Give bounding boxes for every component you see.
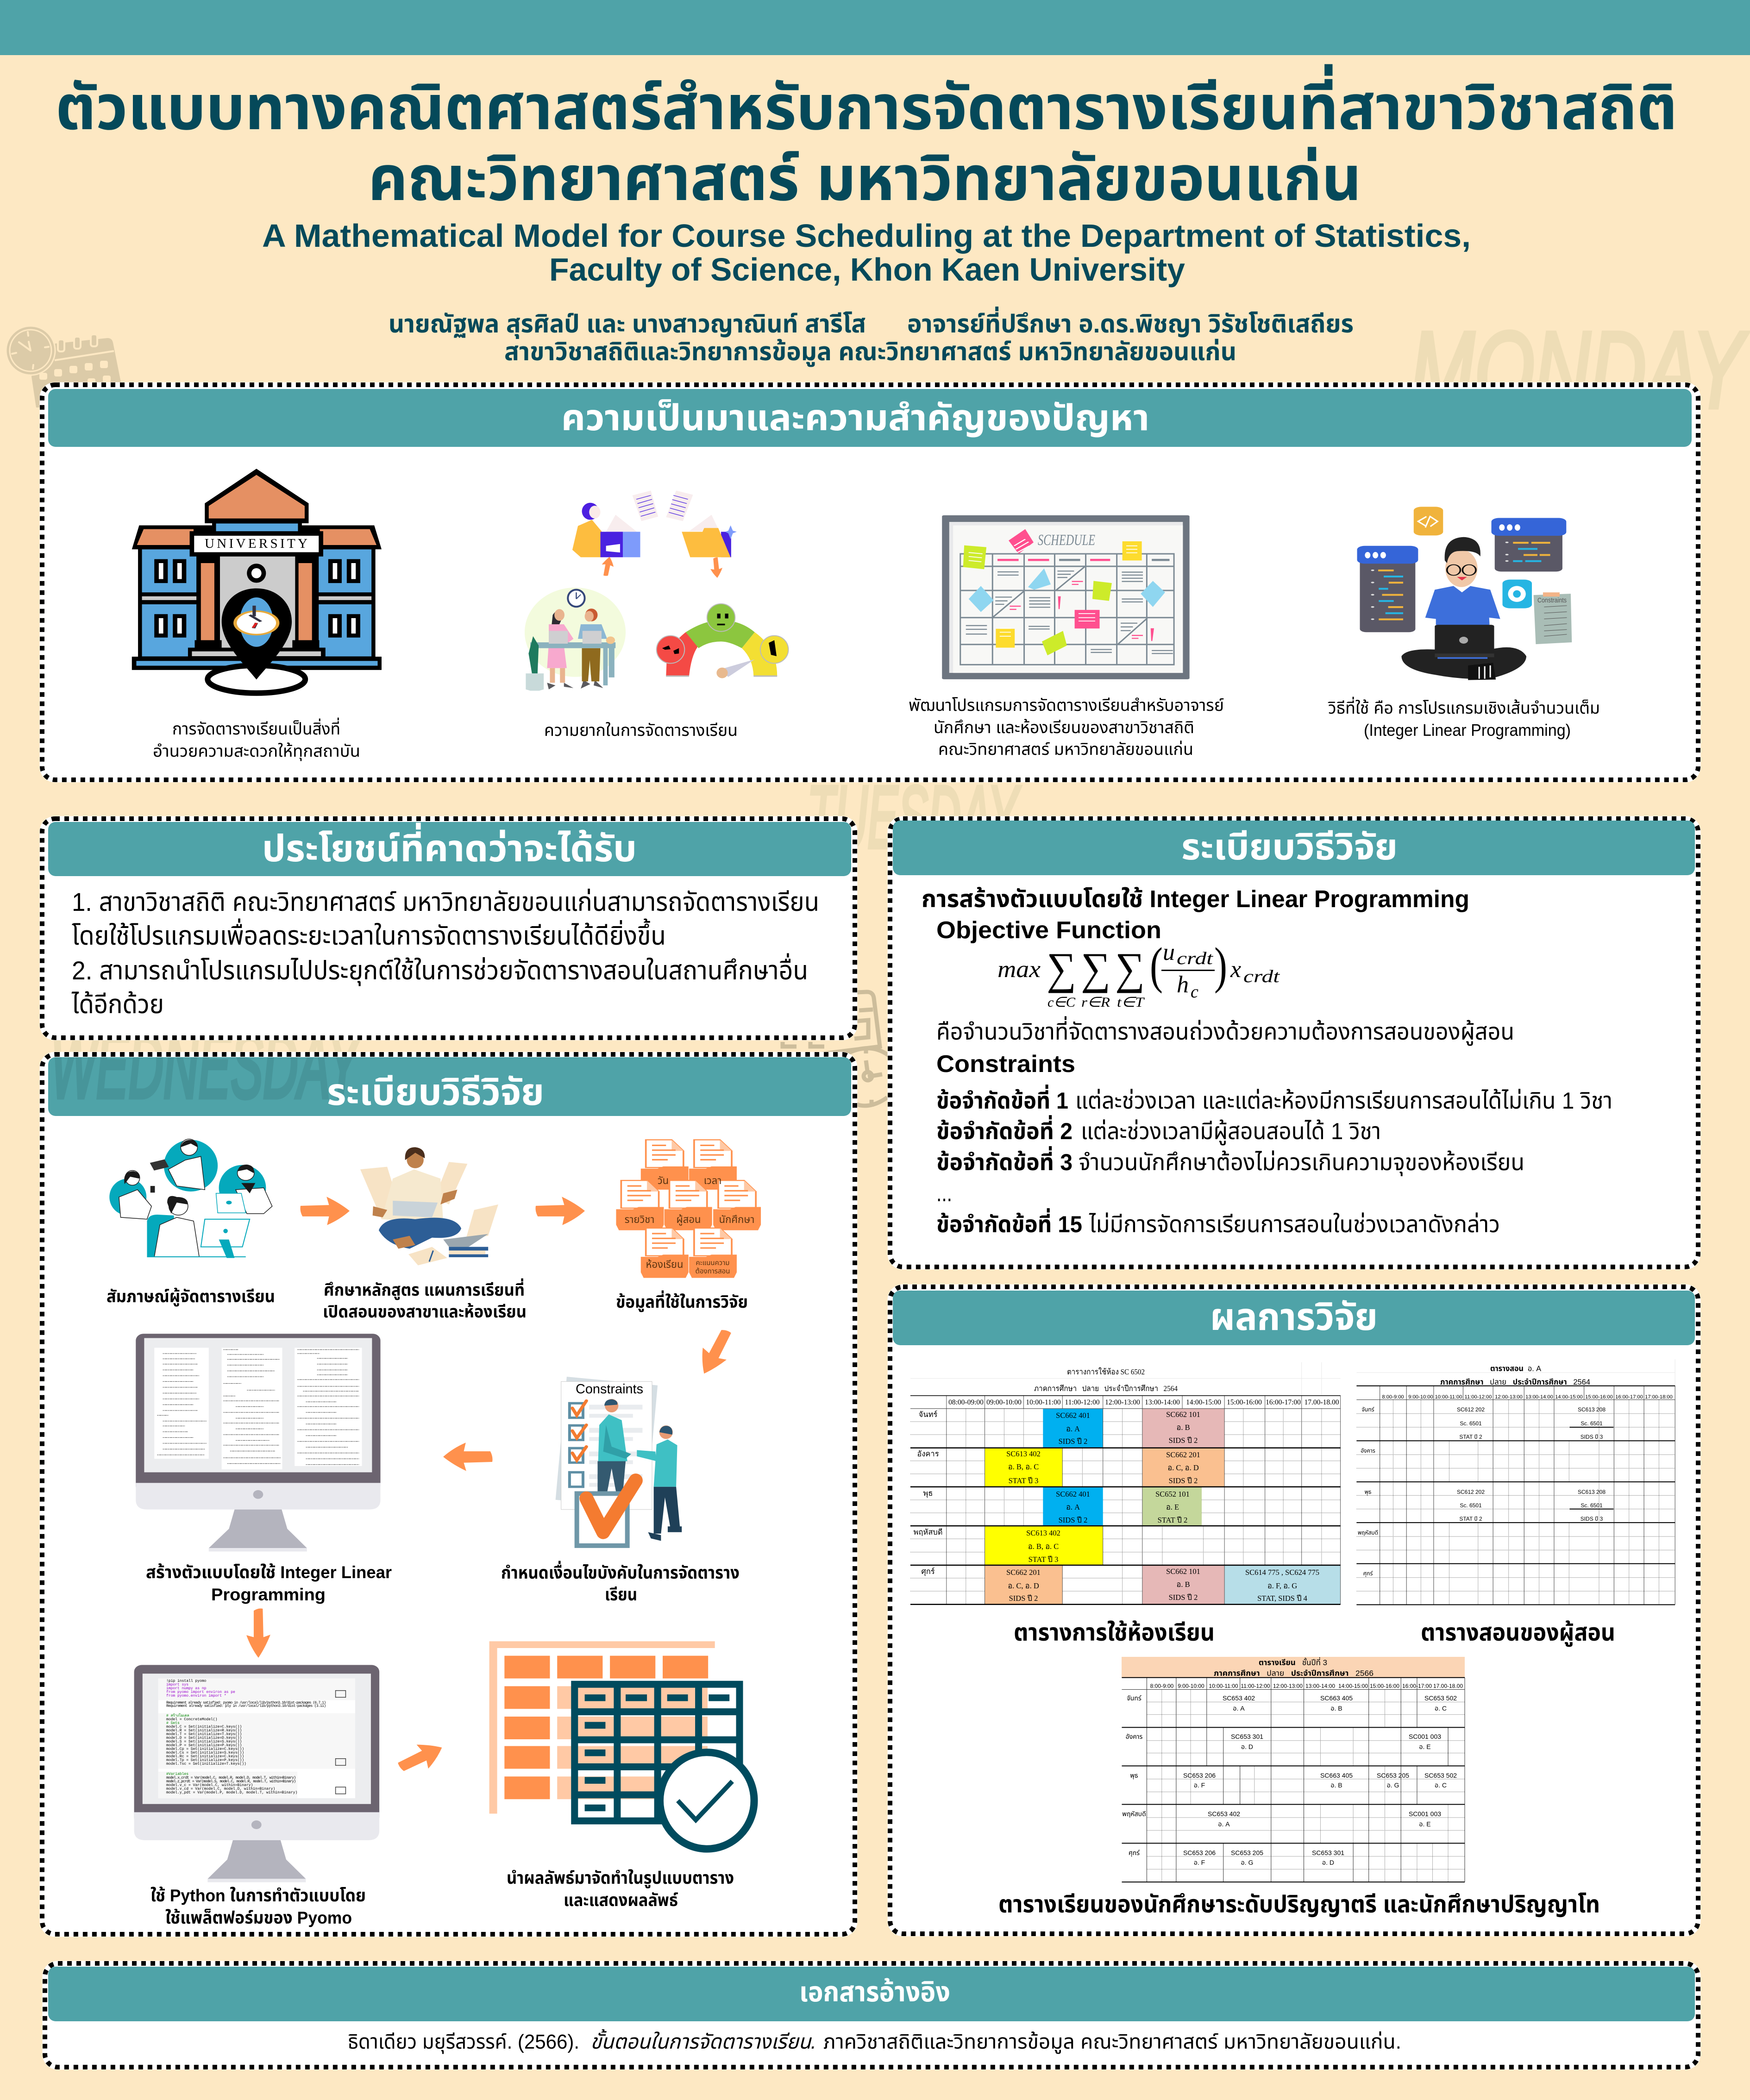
- icon: monitor with python code: model.Tp = Set(initialize=P.keys()): [166, 1758, 244, 1762]
- icon: monitor with python code: model.D = Set(initialize=D.keys()): [166, 1736, 242, 1740]
- caption: room table: ตารางการใช้ห้องเรียน: [1014, 1619, 1215, 1646]
- caption: study curriculum: เปิดสอนของสาขาและห้องเรียน: [323, 1302, 527, 1321]
- panel: research method flow: [42, 1014, 855, 1934]
- table: student timetable: อังคาร: [1126, 1733, 1142, 1740]
- table: room usage: 16:00-17:00: [1266, 1398, 1301, 1406]
- icon: university with location pin: UNIVERSITY: [205, 536, 307, 551]
- authors: [389, 307, 1354, 367]
- title block: [56, 64, 1677, 367]
- table: room usage: SIDS ปี 2: [1059, 1437, 1087, 1446]
- constraint list: แต่ละช่วงเวลามีผู้สอนสอนได้ 1 วิชา: [1081, 1118, 1381, 1145]
- table: lecturer timetable: 8:00-9:00: [1382, 1394, 1404, 1400]
- icon: data folders: ห้องเรียน: [646, 1259, 683, 1270]
- caption: constraints: [501, 1561, 740, 1604]
- table: lecturer timetable: Sc. 6501: [1581, 1420, 1603, 1427]
- icon: data folders: รายวิชา: [625, 1214, 654, 1225]
- arrow diagonal up: [394, 1736, 447, 1779]
- table: room usage: SC662 401: [1056, 1411, 1090, 1420]
- icon: monitor with python code: model.z_pcrdt = Var(model.S, model.C, model.R, model.T, within=Binary): [166, 1780, 296, 1784]
- table: student timetable: SC653 402: [1223, 1694, 1255, 1702]
- table: room usage: 09:00-10:00: [986, 1398, 1022, 1406]
- table: lecturer timetable: Sc. 6501: [1460, 1502, 1482, 1509]
- caption 1: การจัดตารางเรียนเป็นสิ่งที่: [172, 717, 340, 738]
- caption 1: อำนวยความสะดวกให้ทุกสถาบัน: [153, 741, 360, 761]
- table: student timetable: SC653 206: [1183, 1772, 1216, 1779]
- icon: data folders: ต้องการสอน: [695, 1267, 730, 1275]
- icon: data folders: ผู้สอน: [677, 1214, 701, 1226]
- table: lecturer timetable: SIDS ปี 3: [1581, 1434, 1603, 1440]
- caption: study curriculum: [323, 1278, 527, 1321]
- authors: อาจารย์ที่ปรึกษา อ.ดร.พิชญา วิรัชโชติเสถียร: [907, 307, 1354, 338]
- table: room usage: พุธ: [923, 1489, 933, 1498]
- table: room usage: STAT ปี 2: [1158, 1516, 1187, 1524]
- table: lecturer timetable: SC612 202: [1457, 1489, 1485, 1495]
- table: lecturer timetable: ภาคการศึกษา ปลาย ประจำปีการศึกษา 2564: [1440, 1378, 1590, 1386]
- header bar: [48, 822, 851, 876]
- table: student timetable: อ. A: [1233, 1705, 1245, 1712]
- panel: references: [45, 1963, 1698, 2067]
- icon: schedule board: SCHEDULE: [1038, 532, 1095, 549]
- caption: model: [146, 1563, 392, 1604]
- table: lecturer timetable: Sc. 6501: [1460, 1420, 1482, 1427]
- formula: r∈R: [1081, 995, 1110, 1010]
- caption 2: ความยากในการจัดตารางเรียน: [544, 721, 738, 740]
- constraint list: ข้อจำกัดข้อที่ 15: [936, 1208, 1082, 1237]
- table: student timetable: อ. A: [1218, 1820, 1230, 1828]
- caption: constraints: เรียน: [605, 1585, 637, 1604]
- table: student timetable: อ. G: [1241, 1859, 1253, 1866]
- table: lecturer timetable: จันทร์: [1362, 1406, 1374, 1413]
- table: student timetable: SC653 402: [1208, 1810, 1240, 1818]
- English title: Faculty of Science, Khon Kaen University: [549, 251, 1185, 288]
- English title: A Mathematical Model for Course Scheduling at the Department of Statistics,: [262, 218, 1471, 254]
- table: room usage: 13:00-14:00: [1145, 1398, 1180, 1406]
- header bar: [893, 1291, 1695, 1345]
- arrow right 1: [300, 1197, 350, 1225]
- arrow right 2: [535, 1197, 585, 1225]
- table: room usage: SC662 201: [1006, 1568, 1041, 1577]
- constraint list: ข้อจำกัดข้อที่ 1: [936, 1084, 1068, 1114]
- table: room usage: 17.00-18.00: [1305, 1398, 1339, 1406]
- header bar: เอกสารอ้างอิง: [799, 1976, 950, 2007]
- table: student timetable: SC653 502: [1424, 1694, 1457, 1702]
- table: room usage: พฤหัสบดี: [913, 1528, 943, 1536]
- table: student timetable: 8:00-9:00: [1150, 1683, 1174, 1689]
- formula: (: [1150, 937, 1163, 994]
- table: lecturer timetable: STAT ปี 2: [1459, 1434, 1482, 1440]
- formula: h: [1177, 972, 1189, 998]
- table: student timetable: อ. D: [1322, 1859, 1334, 1866]
- icon: monitor with python code: model.x_crdt = Var(model.C, model.R, model.D, model.T, within=Binary): [166, 1776, 296, 1780]
- table: lecturer timetable: 16:00-17:00: [1615, 1394, 1643, 1400]
- table: student timetable: SC653 206: [1183, 1849, 1216, 1856]
- table: lecturer timetable: 10:00-11:00: [1435, 1394, 1462, 1400]
- caption: results: นำผลลัพธ์มาจัดทำในรูปแบบตาราง: [507, 1868, 734, 1888]
- table: room usage: อ. B, อ. C: [1028, 1542, 1059, 1551]
- icon: monitor with python code: model.v_c = Var(model.C, within=Binary): [166, 1783, 253, 1787]
- icon: monitor with python code: !pip install pyomo: [166, 1679, 207, 1683]
- icon: constraints and handshake: [556, 1377, 682, 1546]
- benefits text: [71, 887, 819, 1019]
- caption: data: ข้อมูลที่ใช้ในการวิจัย: [616, 1290, 748, 1312]
- table: student timetable: SC653 205: [1377, 1772, 1409, 1779]
- icon: monitor with python code: #Variables: [166, 1772, 188, 1776]
- benefits text: ได้อีกด้วย: [71, 990, 164, 1019]
- table: student timetable: 16:00-17:00: [1402, 1683, 1432, 1689]
- formula: t∈T: [1117, 995, 1145, 1010]
- small arrow up: [600, 556, 615, 577]
- icon: data folders: นักศึกษา: [719, 1214, 754, 1225]
- caption 3: คณะวิทยาศาสตร์ มหาวิทยาลัยขอนแก่น: [938, 740, 1193, 759]
- table: room usage: อ. C, อ. D: [1167, 1463, 1199, 1472]
- formula: crdt: [1177, 949, 1214, 968]
- caption 4: วิธีที่ใช้ คือ การโปรแกรมเชิงเส้นจำนวนเต็ม: [1328, 696, 1600, 717]
- table: room usage: ภาคการศึกษา ปลาย ประจำปีการศึกษา 2564: [1034, 1384, 1178, 1393]
- table: student timetable: SC663 405: [1320, 1772, 1353, 1779]
- caption: model: สร้างตัวแบบโดยใช้ Integer Linear: [146, 1563, 392, 1582]
- table: student timetable: จันทร์: [1127, 1694, 1142, 1702]
- icon: data folders: [616, 1140, 761, 1278]
- icon: monitor with model: [136, 1334, 381, 1551]
- icon: constraints and handshake: Constraints: [576, 1382, 643, 1397]
- table: room usage: 12:00-13:00: [1105, 1398, 1140, 1406]
- table: room usage: SIDS ปี 2: [1009, 1594, 1038, 1603]
- citation: ธิดาเดียว มยุรีสวรรค์. (2566).: [348, 2031, 579, 2054]
- table: lecturer timetable: อังคาร: [1361, 1448, 1375, 1454]
- icon: monitor with python code: model.v_cd = Var(model.C, model.D, within=Binary): [166, 1787, 275, 1791]
- table: student timetable: อ. D: [1241, 1743, 1253, 1750]
- table: lecturer timetable: STAT ปี 2: [1459, 1516, 1482, 1522]
- icon: monitor with python code: import sys: [166, 1683, 188, 1687]
- table: lecturer timetable: 13:00-14:00: [1525, 1394, 1553, 1400]
- Thai title: ตัวแบบทางคณิตศาสตร์สำหรับการจัดตารางเรียนที่สาขาวิชาสถิติ: [56, 64, 1677, 143]
- table: room usage: ศุกร์: [921, 1567, 935, 1576]
- table: lecturer timetable: SIDS ปี 3: [1581, 1516, 1603, 1522]
- table: room usage: 15:00-16:00: [1227, 1398, 1262, 1406]
- icon: monitor with python code: from pyomo import environ as pe: [166, 1690, 235, 1694]
- table: room usage: SC662 401: [1056, 1490, 1090, 1498]
- authors: สาขาวิชาสถิติและวิทยาการข้อมูล คณะวิทยาศาสตร์ มหาวิทยาลัยขอนแก่น: [504, 338, 1236, 367]
- objective description: คือจำนวนวิชาที่จัดตารางสอนถ่วงด้วยความต้องการสอนของผู้สอน: [936, 1016, 1514, 1046]
- English title: [262, 218, 1471, 288]
- caption: results: และแสดงผลลัพธ์: [564, 1891, 678, 1910]
- table: student timetable: ตารางเรียน ชั้นปีที่ 3: [1259, 1657, 1327, 1667]
- panel: background and significance: [42, 385, 1698, 780]
- table: room usage: SIDS ปี 2: [1169, 1476, 1198, 1485]
- table: room usage: SC652 101: [1155, 1490, 1190, 1498]
- table: student timetable: SC653 301: [1312, 1849, 1344, 1856]
- table: lecturer timetable: ศุกร์: [1363, 1570, 1373, 1577]
- table: room usage: อ. A: [1066, 1503, 1080, 1511]
- arrow left: [443, 1442, 493, 1471]
- icon: programmer with laptop: Constraints: [1537, 596, 1567, 604]
- table: student timetable: SC663 405: [1320, 1694, 1353, 1702]
- table: room usage: SC662 101: [1166, 1410, 1200, 1419]
- caption 3: นักศึกษา และห้องเรียนของสาขาวิชาสถิติ: [934, 718, 1194, 737]
- citation: [348, 2029, 1401, 2054]
- table: room usage: อังคาร: [917, 1449, 939, 1458]
- table: student timetable: อ. B: [1330, 1781, 1342, 1789]
- caption: student table: ตารางเรียนของนักศึกษาระดับปริญญาตรี และนักศึกษาปริญญาโท: [998, 1891, 1600, 1918]
- table: student timetable: SC653 502: [1424, 1772, 1457, 1779]
- caption 1: [153, 717, 360, 761]
- table: room usage: SIDS ปี 2: [1169, 1593, 1198, 1602]
- citation: ภาควิชาสถิติและวิทยาการข้อมูล คณะวิทยาศาสตร์ มหาวิทยาลัยขอนแก่น.: [823, 2031, 1401, 2054]
- Thai title: คณะวิทยาศาสตร์ มหาวิทยาลัยขอนแก่น: [368, 144, 1361, 213]
- constraint list: [936, 1084, 1612, 1237]
- table: room usage: อ. B: [1176, 1423, 1190, 1432]
- header bar: ผลการวิจัย: [1210, 1296, 1378, 1338]
- table: student timetable: 13:00-14:00: [1305, 1683, 1335, 1689]
- panel: ILP formulation: [890, 819, 1698, 1267]
- table: student timetable: 10:00-11:00: [1209, 1683, 1238, 1689]
- header bar: ระเบียบวิธีวิจัย: [327, 1072, 544, 1113]
- icon: monitor with python code: model.P = Set(initialize=P.keys()): [166, 1743, 242, 1748]
- table: student timetable: SC653 205: [1231, 1849, 1263, 1856]
- header bar: WEDNESDAY: [50, 1014, 362, 1117]
- decorative icon: clock and calendar: [6, 326, 125, 407]
- heading: ILP: การสร้างตัวแบบโดยใช้ Integer Linear Programming: [922, 886, 1469, 913]
- caption: interview: สัมภาษณ์ผู้จัดตารางเรียน: [107, 1287, 275, 1306]
- table: student timetable: อ. F: [1194, 1859, 1205, 1866]
- table: room usage: SIDS ปี 2: [1059, 1516, 1087, 1524]
- table: student timetable: 17.00-18.00: [1433, 1683, 1463, 1689]
- icon: monitor with python code: Requirement already satisfied: pyomo in /usr/local/lib/python3.10/dist-packages (6.7.1): [166, 1701, 326, 1705]
- benefits text: โดยใช้โปรแกรมเพื่อลดระยะเวลาในการจัดตารางเรียนได้ดียิ่งขึ้น: [72, 918, 666, 950]
- table: room usage: 11:00-12:00: [1065, 1398, 1100, 1406]
- caption: python: [151, 1886, 366, 1927]
- caption: python: ใช้แพล็ตฟอร์มของ Pyomo: [165, 1908, 352, 1927]
- panel: results: [890, 1287, 1698, 1934]
- Thai title: [56, 64, 1677, 213]
- arrow down: [246, 1608, 270, 1658]
- formula: c∈C: [1047, 995, 1076, 1010]
- icon: monitor with python code: [134, 1665, 379, 1882]
- constraint list: จำนวนนักศึกษาต้องไม่ควรเกินความจุของห้องเรียน: [1079, 1149, 1524, 1176]
- icon: data folders: เวลา: [704, 1175, 721, 1186]
- table: student timetable: 9:00-10:00: [1178, 1683, 1204, 1689]
- benefits text: 2. สามารถนำโปรแกรมไปประยุกต์ใช้ในการช่วยจัดตารางสอนในสถานศึกษาอื่น: [72, 953, 808, 986]
- formula: ∑: [1047, 944, 1076, 993]
- formula: ): [1214, 937, 1227, 994]
- formula: crdt: [1243, 967, 1280, 986]
- header bar: [48, 1967, 1695, 2021]
- table: lecturer timetable: 9:00-10:00: [1408, 1394, 1433, 1400]
- icon: university with location pin: [132, 469, 382, 693]
- constraint list: ข้อจำกัดข้อที่ 2: [936, 1115, 1073, 1144]
- table: room usage: STAT, SIDS ปี 4: [1257, 1594, 1307, 1603]
- icon: result table with check: [489, 1641, 754, 1849]
- table: student timetable: 14:00-15:00: [1338, 1683, 1368, 1689]
- formula: x: [1230, 956, 1241, 983]
- constraint list: แต่ละช่วงเวลา และแต่ละห้องมีการเรียนการสอนได้ไม่เกิน 1 วิชา: [1075, 1088, 1612, 1114]
- formula: u: [1163, 939, 1175, 965]
- icon: monitor with python code: from pyomo.environ import *: [166, 1694, 226, 1698]
- caption 4: [1328, 696, 1600, 740]
- icon: monitor with python code: import numpy as np: [166, 1686, 207, 1691]
- icon: monitor with python code: model = ConcreteModel(): [166, 1718, 217, 1722]
- table: room usage: SC613 402: [1026, 1529, 1060, 1537]
- icon: schedule board: [942, 515, 1190, 679]
- table: lecturer timetable: 17:00-18:00: [1645, 1394, 1673, 1400]
- table: room usage: STAT ปี 3: [1009, 1476, 1038, 1485]
- table: lecturer timetable: 11:00-12:00: [1465, 1394, 1492, 1400]
- caption: results: [507, 1868, 734, 1910]
- caption: study curriculum: ศึกษาหลักสูตร แผนการเรียนที่: [324, 1278, 525, 1300]
- icon: person reading curriculum: [360, 1147, 498, 1266]
- icon: monitor with python code: model.y_pdt = Var(model.P, model.D, model.T, within=Binary): [166, 1791, 297, 1795]
- caption: lecturer table: ตารางสอนของผู้สอน: [1421, 1619, 1615, 1647]
- table: room usage: SC662 101: [1166, 1567, 1200, 1576]
- table: room usage: อ. C, อ. D: [1008, 1581, 1039, 1590]
- table: student timetable: อ. E: [1419, 1820, 1431, 1828]
- caption 3: พัฒนาโปรแกรมการจัดตารางเรียนสำหรับอาจารย์: [909, 696, 1224, 715]
- table: room usage: SC614 775 , SC624 775: [1245, 1568, 1319, 1577]
- icon: programmer with laptop: [1357, 507, 1572, 680]
- table: room usage: อ. E: [1166, 1503, 1179, 1511]
- table: lecturer timetable: SC612 202: [1457, 1406, 1485, 1413]
- table: lecturer timetable: [1356, 1359, 1675, 1605]
- icon: interview people: [109, 1139, 272, 1258]
- table: lecturer timetable: 15:00-16:00: [1585, 1394, 1613, 1400]
- table: room usage: 10:00-11:00: [1026, 1398, 1061, 1406]
- constraint list: ...: [936, 1180, 952, 1206]
- table: room usage: 08:00-09:00: [948, 1398, 984, 1406]
- panel: expected benefits: [42, 819, 855, 1038]
- formula: [997, 937, 1280, 1010]
- table: student timetable: 12:00-13:00: [1273, 1683, 1303, 1689]
- table: student timetable: ภาคการศึกษา ปลาย ประจำปีการศึกษา 2566: [1214, 1669, 1374, 1678]
- table: student timetable: อ. C: [1435, 1705, 1447, 1712]
- table: lecturer timetable: SC613 208: [1578, 1406, 1606, 1413]
- header bar: ประโยชน์ที่คาดว่าจะได้รับ: [262, 823, 637, 869]
- table: room usage: อ. B: [1176, 1580, 1190, 1589]
- constraint list: ข้อจำกัดข้อที่ 3: [936, 1146, 1073, 1175]
- watermark: TUESDAY: TUESDAY: [807, 768, 1021, 866]
- caption: python: ใช้ Python ในการทำตัวแบบโดย: [151, 1886, 366, 1905]
- caption 3: [909, 696, 1224, 759]
- icon: monitor with python code: model.T = Set(initialize=T.keys()): [166, 1732, 242, 1736]
- header bar: [893, 821, 1695, 875]
- table: room usage: STAT ปี 3: [1029, 1555, 1058, 1564]
- benefits text: 1. สาขาวิชาสถิติ คณะวิทยาศาสตร์ มหาวิทยาลัยขอนแก่นสามารถจัดตารางเรียน: [72, 887, 819, 916]
- table: room usage: SC613 402: [1006, 1449, 1041, 1458]
- table: student timetable: พุธ: [1130, 1772, 1138, 1780]
- formula: ∑: [1115, 944, 1145, 993]
- formula: c: [1191, 982, 1198, 1002]
- table: lecturer timetable: 14:00-15:00: [1555, 1394, 1583, 1400]
- heading: constraints: Constraints: [936, 1051, 1075, 1078]
- table: room usage: 14:00-15:00: [1186, 1398, 1221, 1406]
- caption 4: (Integer Linear Programming): [1364, 721, 1571, 740]
- table: student timetable: SC653 301: [1231, 1733, 1263, 1740]
- table: student timetable: อ. F: [1194, 1781, 1205, 1789]
- watermark: WEDNESDAY: WEDNESDAY: [50, 1014, 362, 1117]
- table: lecturer timetable: พฤหัสบดี: [1358, 1530, 1378, 1536]
- header bar: [48, 389, 1692, 447]
- caption: constraints: กำหนดเงื่อนไขบังคับในการจัดตาราง: [501, 1561, 740, 1582]
- table: room usage: อ. A: [1066, 1424, 1080, 1433]
- table: student timetable: อ. E: [1419, 1743, 1431, 1750]
- table: lecturer timetable: Sc. 6501: [1581, 1502, 1603, 1509]
- table: student timetable: อ. G: [1387, 1781, 1399, 1789]
- header bar: [48, 1057, 851, 1116]
- table: room usage: อ. F, อ. G: [1267, 1581, 1297, 1590]
- table: student timetable: [1122, 1657, 1465, 1882]
- icon: monitor with python code: model.Cs = Set(initialize=S.keys()): [166, 1751, 244, 1755]
- table: lecturer timetable: SC613 208: [1578, 1489, 1606, 1495]
- table: room usage: [910, 1362, 1341, 1605]
- icon: monitor with python code: model.C = Set(initialize=C.keys()): [166, 1725, 242, 1729]
- top banner: [0, 0, 1750, 55]
- table: lecturer timetable: ตารางสอน อ. A: [1490, 1364, 1542, 1373]
- table: room usage: จันทร์: [919, 1410, 937, 1419]
- table: room usage: อ. B, อ. C: [1008, 1462, 1039, 1471]
- table: lecturer timetable: พุธ: [1365, 1489, 1371, 1495]
- table: student timetable: 15:00-16:00: [1370, 1683, 1399, 1689]
- table: student timetable: อ. C: [1435, 1781, 1447, 1789]
- icon: data folders: คะแนนความ: [696, 1259, 730, 1267]
- header bar: ความเป็นมาและความสำคัญของปัญหา: [561, 397, 1149, 438]
- arrow diagonal: [692, 1324, 739, 1380]
- table: room usage: SC662 201: [1166, 1450, 1200, 1459]
- small arrow down: [709, 557, 723, 578]
- icon: monitor with python code: model.Rc = Set(initialize=C.keys()): [166, 1755, 244, 1759]
- icon: monitor with python code: model.R = Set(initialize=R.keys()): [166, 1729, 242, 1733]
- header bar: ระเบียบวิธีวิจัย: [1181, 827, 1398, 867]
- decorative icon: right calendar: [769, 992, 889, 1107]
- table: student timetable: อ. B: [1330, 1705, 1342, 1712]
- constraint list: ไม่มีการจัดการเรียนการสอนในช่วงเวลาดังกล่าว: [1089, 1211, 1500, 1237]
- icon: monitor with python code: model.Cp = Set(initialize=C.keys()): [166, 1747, 244, 1751]
- icon: monitor with python code: model.Tsc = Set(initialize=T.keys()): [166, 1762, 246, 1766]
- table: room usage: SIDS ปี 2: [1169, 1436, 1198, 1445]
- table: student timetable: SC001 003: [1409, 1810, 1441, 1818]
- icon: monitor with python code: # สร้างโมเดล: [166, 1713, 189, 1718]
- table: student timetable: SC001 003: [1409, 1733, 1441, 1740]
- table: student timetable: พฤหัสบดี: [1122, 1810, 1146, 1818]
- table: student timetable: ศุกร์: [1129, 1849, 1140, 1857]
- authors: นายณัฐพล สุรศิลป์ และ นางสาวญาณินท์ สารีโส: [389, 310, 866, 339]
- formula: ∑: [1081, 944, 1110, 993]
- table: student timetable: 11:00-12:00: [1241, 1683, 1270, 1689]
- table: lecturer timetable: 12:00-13:00: [1495, 1394, 1523, 1400]
- heading: objective function: Objective Function: [936, 917, 1161, 944]
- citation: ขั้นตอนในการจัดตารางเรียน.: [590, 2029, 816, 2053]
- table: room usage: ตารางการใช้ห้อง SC 6502: [1067, 1367, 1145, 1376]
- icon: monitor with python code: model.S = Set(initialize=S.keys()): [166, 1740, 242, 1744]
- formula: max: [997, 956, 1041, 983]
- icon: monitor with python code: # Sets: [166, 1721, 180, 1725]
- caption: model: Programming: [211, 1585, 326, 1604]
- icon: data folders: วัน: [658, 1175, 669, 1186]
- icon: scheduling difficulty: [525, 490, 788, 691]
- icon: monitor with python code: Requirement already satisfied: ply in /usr/local/lib/python3.10/dist-packages (3.11): [166, 1704, 326, 1708]
